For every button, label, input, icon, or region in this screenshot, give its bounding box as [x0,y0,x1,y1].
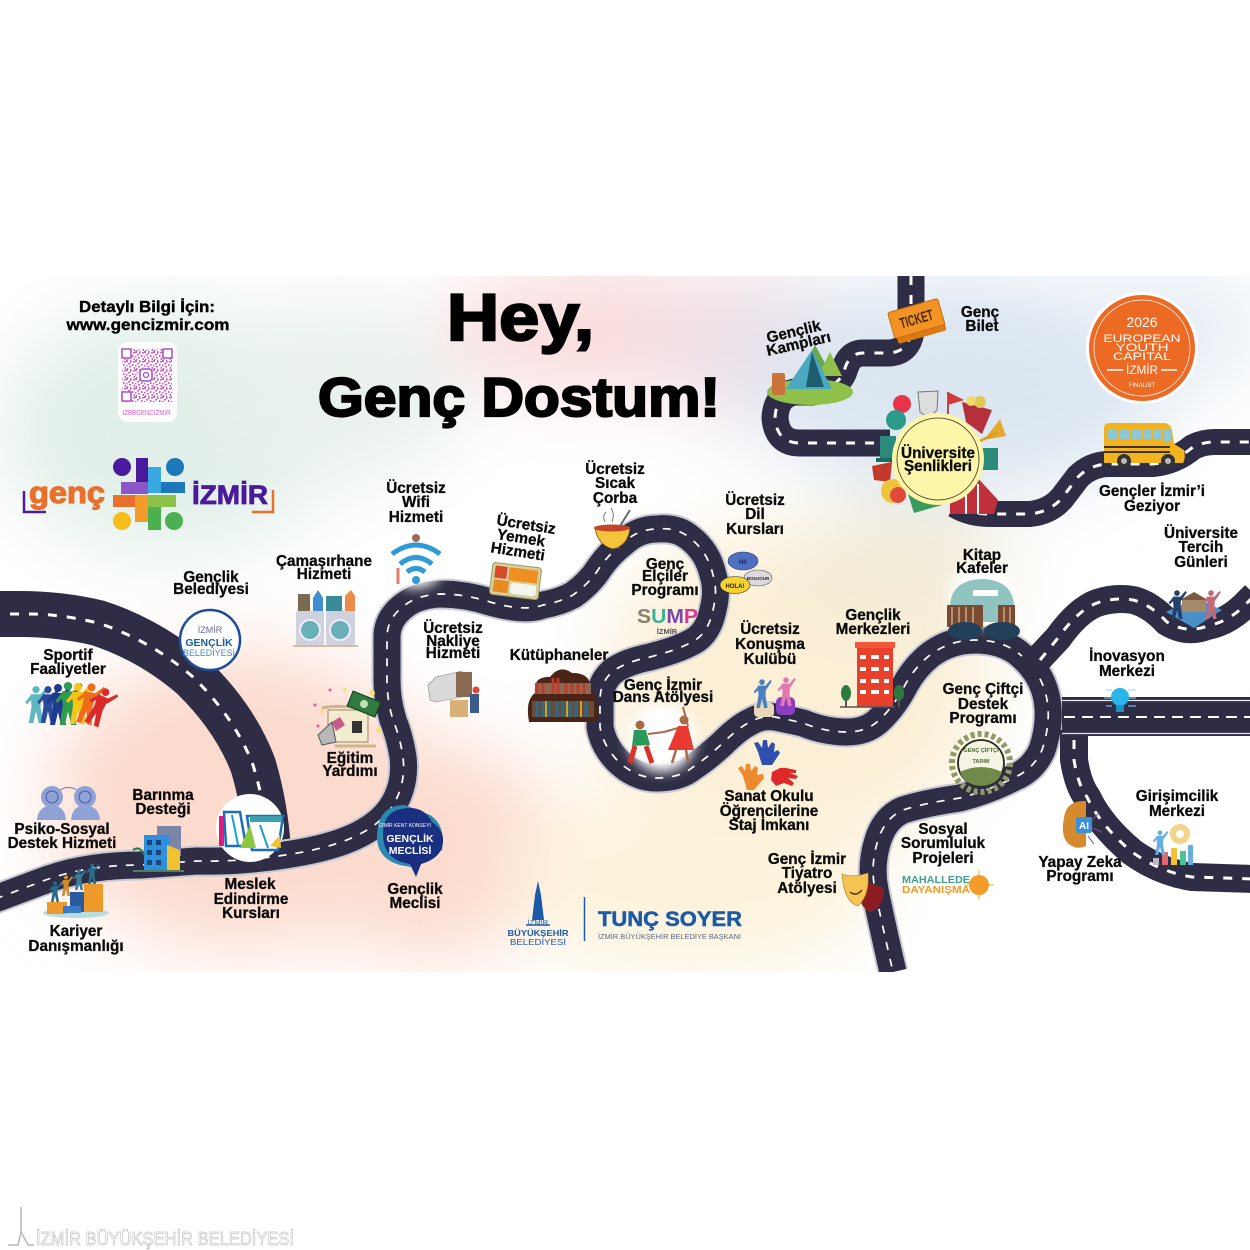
station: Ücretsiz Yemek Hizmeti [489,512,557,600]
icon: school bus [1104,423,1185,468]
station: Eğitim Yardımı [314,688,382,780]
label: Tercih [1179,539,1223,556]
label: Eğitim [327,750,373,767]
label: Hizmeti [297,566,351,583]
station: Sportif Faaliyetler [25,647,119,730]
watermark: İzmir Büyükşehir Belediyesi: İZMİR BÜYÜKŞEHİR BELEDİYESİ [36,1229,294,1249]
icon: round logo: BELEDİYESİ [183,648,235,658]
label: Elçiler [642,568,688,585]
icon: round logo: İZMİR [198,625,223,635]
station: Gençlik Meclisi [377,805,443,912]
icon: blue speech badge: İZMİR KENT KONSEYİ [379,822,431,829]
station: Genç Çiftçi Destek Programı [943,681,1023,792]
icon: farmer wreath badge: TARIM [972,759,990,765]
label: Merkezi [1149,803,1205,820]
icon: cloud bookshelf [528,669,598,722]
label: Hizmeti [490,539,546,565]
label: Yardımı [322,763,378,780]
icon: round logo [180,610,240,670]
label: Genç İzmir [768,851,846,868]
station: Gençler İzmir'i Geziyor [1099,423,1205,515]
icon: apartment buildings [133,826,184,871]
logo: İzmir Büyükşehir Belediyesi and Tunç Soyer [508,881,742,947]
label: Şenlikleri [904,458,972,475]
label: Kulübü [744,651,796,668]
road: upper right, ticket to festival [775,270,911,443]
watermark: İzmir Büyükşehir Belediyesi [8,1207,294,1249]
label: Genç İzmir [624,677,702,694]
label: Destek [958,696,1009,713]
icon: AI brain: AI [1079,821,1089,832]
icon: speech bubbles [720,552,772,594]
info text: website: www.gencizmir.com [65,317,230,334]
label [762,316,832,360]
label: Meclisi [389,895,441,912]
icon: Mahallede Dayanışma logo: MAHALLEDE [902,874,970,886]
soft watercolor background [0,265,1250,970]
label: Belediyesi [173,581,249,598]
label: Sıcak [595,475,635,492]
road: thick left road [0,614,268,850]
info text: website: Detaylı Bilgi İçin: [79,298,215,316]
label: Gençlik [765,317,823,347]
station: Genç Elçiler Programı [631,556,699,636]
station: Genç İzmir Tiyatro Atölyesi [768,851,884,912]
station: Sosyal Sorumluluk Projeleri [901,821,994,900]
label: Danışmanlığı [28,938,124,955]
label: Üniversite [901,445,975,462]
logo: İzmir Büyükşehir Belediyesi and Tunç Soyer: BÜYÜKŞEHİR [508,928,568,938]
label: İnovasyon [1089,648,1165,665]
icon: book cafe [947,579,1020,640]
label: Konuşma [735,636,805,653]
label: Gençlik [845,607,901,624]
station: Üniversite Tercih Günleri [1164,525,1238,628]
QR code: IZBBGENCIZMIR [122,410,170,417]
icon: farmer wreath badge [952,734,1010,792]
station: Gençlik Belediyesi [173,569,249,670]
icon: Mahallede Dayanışma logo [902,870,994,900]
label: Girişimcilik [1136,788,1219,805]
badge: European Youth Capital: 2026 [1126,314,1158,330]
icon: light bulb [1104,688,1136,712]
icon: food tray [489,562,542,600]
station: Çamaşırhane Hizmeti [276,553,372,646]
label: Sanat Okulu [724,788,814,805]
icon: festival items [872,391,1006,514]
badge: European Youth Capital: İZMİR [1126,363,1158,377]
icon: SUMP logo: SUMP [637,606,698,628]
label: Kariyer [50,923,102,940]
label: Kursları [726,521,784,538]
road: horizontal two-lane road [1062,697,1250,736]
label: Çamaşırhane [276,553,372,570]
title: Hey, [447,280,594,354]
label: Programı [949,710,1017,727]
label: Merkezi [1099,663,1155,680]
info text: website [65,298,230,334]
label: Yapay Zeka [1038,854,1122,871]
icon: SUMP logo: İZMİR [657,627,678,636]
station: Barınma Desteği [132,787,194,871]
station: Genç İzmir Dans Atölyesi [613,677,713,763]
label: Sorumluluk [901,835,986,852]
road: main winding road [0,529,1048,972]
icon: speech bubbles: BONJOUR [747,576,770,581]
label: Gençlik [183,569,239,586]
station: Kariyer Danışmanlığı [28,864,124,955]
icon: steps and people [43,864,109,918]
icon: mosaic round logo [216,794,284,862]
label: Ücretsiz [495,512,557,538]
label: Dil [745,506,765,523]
label: Gençler İzmir’i [1099,483,1205,500]
station: Ücretsiz Dil Kursları [720,492,785,594]
label: Hizmeti [389,509,443,526]
station: Kitap Kafeler [947,547,1020,640]
label: Çorba [593,490,638,507]
label: Günleri [1174,554,1228,571]
station: İnovasyon Merkezi [1089,648,1165,712]
white glows behind icons [386,528,1012,772]
label: Ücretsiz [585,461,645,478]
logo: İzmir Büyükşehir Belediyesi and Tunç Soyer: TUNÇ SOYER [598,908,742,931]
icon: two people talking [754,677,796,717]
label: Programı [631,582,699,599]
label: Faaliyetler [30,661,106,678]
icon: growth chart and gear [1153,824,1193,865]
label: Merkezleri [836,621,910,638]
label: Hizmeti [426,645,480,662]
badge: European Youth Capital: EUROPEAN [1104,333,1181,345]
station: Genç Bilet [888,298,1000,345]
label: Yemek [496,526,547,551]
icon: students on book [1166,590,1222,628]
icon: speech bubbles: HI! [739,560,747,566]
icon: coloured hand prints [738,740,798,790]
icon: theatre masks [842,873,884,912]
label: Bilet [965,318,999,335]
station: Gençlik Merkezleri [836,607,910,707]
logo: Genç İzmir: genç [29,475,105,510]
label: Atölyesi [777,880,837,897]
logo: İzmir Büyükşehir Belediyesi and Tunç Soyer: BELEDİYESİ [510,937,566,947]
icon: Mahallede Dayanışma logo: DAYANIŞMA [902,884,970,896]
station: Gençlik Kampları [762,316,853,405]
icon: coloured athletes [25,681,119,730]
station: Ücretsiz Wifi Hizmeti [386,480,446,584]
icon: washing machines [293,590,358,646]
label: Kütüphaneler [510,647,608,664]
title: Genç Dostum! [318,366,720,428]
label: Kitap [963,547,1001,564]
logo: Genç İzmir [24,458,273,530]
label: Tiyatro [782,865,832,882]
badge: European Youth Capital: FINALIST [1129,383,1156,389]
label: Psiko-Sosyal [14,821,110,838]
QR code [118,342,177,422]
label: Genç [646,556,685,573]
label: Ücretsiz [740,621,800,638]
station: Ücretsiz Sıcak Çorba [585,461,645,549]
label: Ücretsiz [386,480,446,497]
logo: İzmir Büyükşehir Belediyesi and Tunç Soyer: İZMİR BÜYÜKŞEHİR BELEDİYE BAŞKANI [598,932,741,941]
icon: blue speech badge [377,805,443,877]
label: Dans Atölyesi [613,689,713,706]
icon: yellow circle [892,413,984,505]
icon: diploma and banknote [314,688,382,746]
icon: round logo: GENÇLİK [185,636,233,649]
label: Sportif [43,647,94,664]
icon: soup bowl [594,508,630,549]
station: Girişimcilik Merkezi [1136,788,1219,865]
label: Üniversite [1164,525,1238,542]
icon: two heads [37,786,100,820]
label: Kursları [222,905,280,922]
label: Programı [1046,868,1114,885]
label: Geziyor [1124,498,1180,515]
station: Kütüphaneler [510,647,608,722]
station: Sanat Okulu [720,740,818,834]
icon: blue speech badge: MECLİSİ [389,844,431,857]
road: branch to Tercih Günleri [1030,595,1250,668]
label: Kafeler [956,560,1008,577]
label: Gençlik [387,881,443,898]
icon: blue speech badge: GENÇLİK [386,832,434,845]
label: Genç [961,304,1000,321]
badge: European Youth Capital: CAPITAL [1113,351,1171,363]
label: Projeleri [912,850,974,867]
station: Üniversite Şenlikleri [872,391,1006,514]
icon: speech bubbles: HOLA! [726,584,744,590]
label: Öğrencilerine [720,803,818,820]
label: Ücretsiz [725,492,785,509]
label: Meslek [224,876,276,893]
road: branch to Girişimcilik Merkezi [1074,730,1250,879]
logo: İzmir Büyükşehir Belediyesi and Tunç Soyer: İZMİR [528,918,549,927]
label: Nakliye [426,633,480,650]
label: Edindirme [214,891,288,908]
label: Wifi [402,494,430,511]
logo: Genç İzmir: İZMİR [192,480,268,510]
title [318,280,720,428]
badge: European Youth Capital: YOUTH [1116,342,1169,354]
station: Yapay Zeka Programı [1038,801,1122,885]
label: Desteği [135,801,191,818]
icon: moving truck [428,671,480,717]
station: Psiko-Sosyal Destek Hizmeti [8,786,116,852]
icon: dancing couple [630,707,694,763]
station: Meslek Edindirme Kursları [214,794,288,922]
label: Kampları [765,329,832,360]
road: festival to right edge via bus [955,442,1250,514]
label [490,512,557,566]
icon: red building [840,642,904,707]
icon: farmer wreath badge: GENÇ ÇİFTÇİ [963,747,999,754]
label: Barınma [132,787,194,804]
label: Genç Çiftçi [943,681,1023,698]
station: Ücretsiz Konuşma Kulübü [735,621,805,717]
icon: camping tent [767,345,853,405]
icon: ticket: TICKET [898,307,935,332]
label: Staj İmkanı [729,817,809,834]
label: Destek Hizmeti [8,835,116,852]
label: Ücretsiz [423,620,483,637]
station: Ücretsiz Nakliye Hizmeti [423,620,483,717]
badge: European Youth Capital [1086,292,1198,404]
infographic canvas [0,276,1250,1250]
label: Sosyal [918,821,968,838]
icon: wifi symbol [392,534,440,584]
